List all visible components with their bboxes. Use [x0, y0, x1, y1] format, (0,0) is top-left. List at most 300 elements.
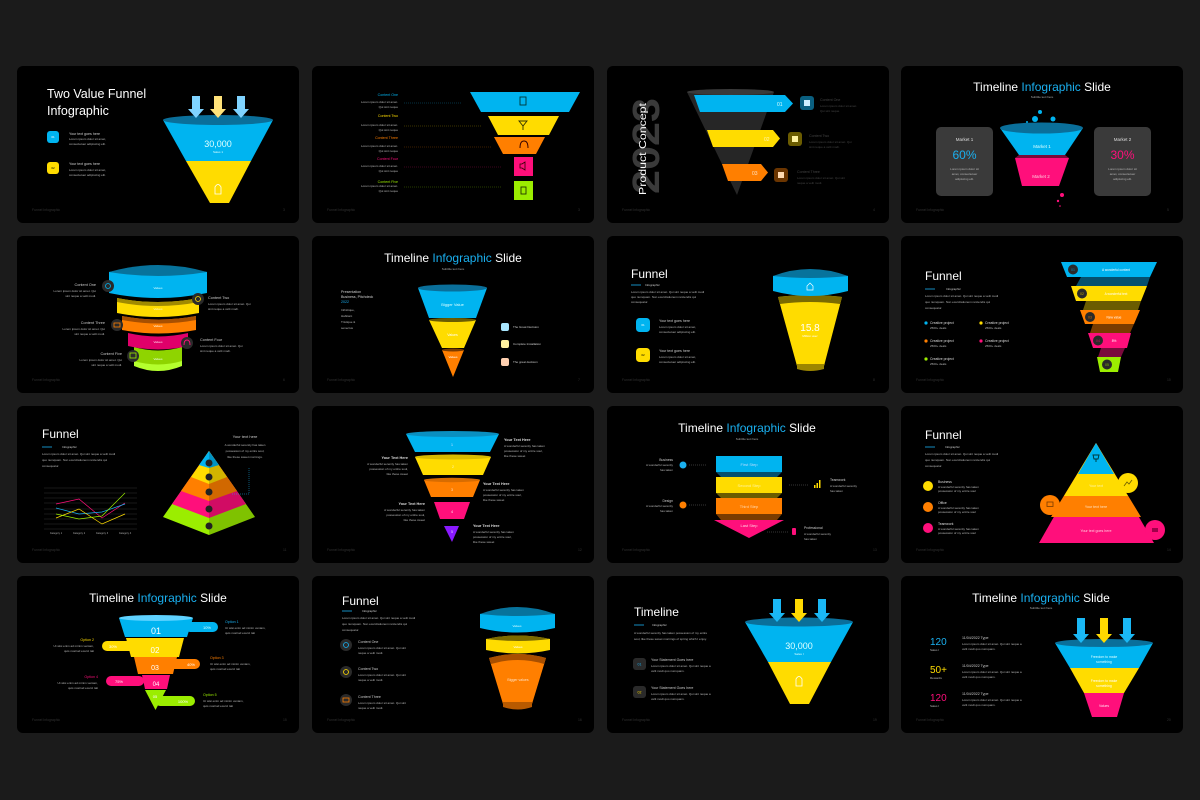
vertical title: Product Concept — [638, 103, 649, 195]
heading: Timeline Infographic Slide — [678, 421, 816, 435]
list item 01 — [47, 131, 106, 146]
list item 02: Lorem ipsum dolor sit amet, — [69, 168, 106, 172]
text blocks: A wonderful serenity has taken — [483, 488, 524, 492]
heading: Timeline Infographic Slide — [384, 251, 522, 265]
stats: Lorem ipsum dolor sit amet. Qui sint neque a — [962, 670, 1022, 674]
stats — [930, 636, 1022, 708]
funnel with pills — [102, 615, 218, 710]
heading: Lorem ipsum dolor sit amet. Qui sint neque a velit modi — [925, 294, 999, 298]
icons and text: Lorem ipsum dolor sit amet. Qui — [809, 140, 852, 144]
legend: Business — [938, 480, 952, 484]
content list: Content Two — [358, 667, 378, 671]
funnel with pills: 02 — [151, 646, 160, 655]
option texts: Ut wisi enim ad minim veniam, — [225, 626, 266, 630]
icons and text: Content One — [820, 98, 840, 102]
item 01 — [636, 318, 696, 334]
left labels: Lorem ipsum dolor sit amet. — [361, 164, 398, 168]
heading: consequatur. — [631, 300, 648, 304]
legend icons — [501, 323, 541, 366]
text blocks: A wonderful serenity has taken — [473, 530, 514, 534]
funnel chart — [163, 115, 273, 203]
slide 4: markets funnel: 5 — [1167, 208, 1169, 212]
option texts: Option 4 — [84, 675, 98, 679]
text blocks: like these sweet — [473, 540, 495, 544]
heading: quo numquam. Non exercitationem reiciendis qui — [631, 295, 696, 299]
item 02: consectetuer adipiscing elit. — [659, 360, 696, 364]
ring stack: Values — [154, 324, 163, 328]
item 01: Lorem ipsum dolor sit amet, — [659, 325, 696, 329]
funnel: 30,000 — [785, 641, 813, 651]
funnel: Freedom to make — [1091, 679, 1117, 683]
slide 12: pyramid with badges — [901, 406, 1183, 563]
left labels: Lorem ipsum dolor sit amet. — [361, 184, 398, 188]
labels: sint neque a velit modi. — [65, 294, 96, 298]
zigzag funnel: 03 — [1088, 316, 1092, 320]
heading: Lorem ipsum dolor sit amet. Qui sint neque a velit modi — [925, 452, 999, 456]
step bars — [714, 456, 784, 538]
zigzag funnel: New value — [1107, 316, 1122, 320]
heading: quo numquam. Non exercitationem reiciendis qui — [42, 458, 107, 462]
market 1 card: Lorem ipsum dolor sit — [950, 167, 979, 171]
content list — [340, 639, 406, 710]
stats: velit modi quo numquam. — [962, 675, 996, 679]
left text: 2022 — [341, 300, 349, 304]
heading: Infographic — [946, 287, 961, 291]
pyramid: Your text — [1089, 484, 1103, 488]
left labels — [361, 93, 399, 193]
left labels: Content One — [378, 93, 398, 97]
heading: consequatur. — [925, 306, 942, 310]
arrow steps — [694, 95, 793, 181]
legend: possession of my entire soul — [938, 531, 976, 535]
callout: Your text here — [233, 434, 258, 439]
pyramid: Your text here — [1085, 505, 1107, 509]
stats: velit modi quo numquam. — [962, 703, 996, 707]
labels — [53, 283, 251, 367]
left labels: Content Five — [378, 180, 398, 184]
item 01: consectetuer adipiscing elit. — [659, 330, 696, 334]
content list: Content One — [358, 640, 378, 644]
option texts: quis nostrud exerci tati — [203, 704, 233, 708]
funnel — [773, 269, 848, 371]
heading: consequatur. — [342, 628, 359, 632]
slide 1: two value funnel: Funnel Infographic — [32, 208, 60, 212]
slide 7: funnel 15.8 — [607, 236, 889, 393]
text blocks: Your Text Here — [473, 524, 499, 528]
left text: senectus — [341, 326, 354, 330]
pyramid: Your text goes here — [1080, 529, 1112, 533]
heading: Funnel — [42, 427, 79, 441]
heading: consequatur. — [42, 464, 59, 468]
funnel: Values — [449, 355, 458, 359]
slide 2: five step funnel: 3 — [578, 208, 580, 212]
slide 11: step funnel — [607, 406, 889, 563]
icons and text: Lorem ipsum dolor sit amet. — [820, 104, 857, 108]
legend icons: The Great Decision — [513, 325, 539, 329]
stats: Lorem ipsum dolor sit amet. Qui sint neque a — [962, 698, 1022, 702]
callout: A wonderful serenity has taken — [225, 443, 266, 447]
heading — [42, 427, 116, 468]
heading: quo numquam. Non exercitationem reiciendis qui — [342, 622, 407, 626]
slide 6: three level funnel: 7 — [578, 378, 580, 382]
funnel discs: 3 — [451, 487, 454, 492]
legend: Office — [938, 501, 947, 505]
left labels: Qui sint neque — [379, 189, 398, 193]
slide 14: ring funnel orange — [312, 576, 594, 733]
legend: A wonderful serenity has taken — [938, 506, 979, 510]
list item 02: Your text goes here — [69, 162, 100, 166]
funnel discs: 2 — [452, 464, 455, 469]
labels: sint neque a velit modi. — [200, 349, 231, 353]
heading: Funnel — [925, 269, 962, 283]
line chart: Category 2 — [73, 532, 86, 535]
heading: Infographic — [362, 609, 377, 613]
market 2 card — [1094, 127, 1151, 196]
content list: Lorem ipsum dolor sit amet. Qui sint — [358, 646, 406, 650]
slide 5: stacked rings: Funnel Infographic — [32, 378, 60, 382]
funnel discs — [406, 431, 499, 542]
text blocks: possession of my entire soul, — [483, 493, 522, 497]
zigzag funnel: 02 — [1080, 292, 1084, 296]
legend: 2500+ deals — [985, 326, 1002, 330]
funnel: Values — [1099, 704, 1109, 708]
icons and text: neque a velit modi. — [797, 181, 822, 185]
arrows — [769, 599, 830, 622]
heading: Infographic — [47, 104, 109, 118]
side labels: has taken — [804, 537, 817, 541]
heading: Timeline — [634, 605, 679, 619]
slide 11: step funnel: 13 — [873, 548, 877, 552]
list item 01: Lorem ipsum dolor sit amet, — [69, 137, 106, 141]
funnel: something — [1096, 684, 1112, 688]
left labels: Lorem ipsum dolor sit amet. — [361, 144, 398, 148]
heading: Funnel — [631, 267, 668, 281]
market 1 card: Market 1 — [956, 137, 974, 142]
icons and text: sint neque a velit modi. — [809, 145, 840, 149]
funnel: Values — [447, 333, 458, 337]
stats: Sales I — [930, 648, 939, 652]
legend — [923, 480, 979, 535]
heading: Subtitle text here — [736, 437, 759, 441]
heading — [384, 251, 522, 271]
slide 8: zigzag funnel: 10 — [1167, 378, 1171, 382]
option texts: Ut wisi enim ad minim veniam, — [203, 699, 244, 703]
content list: neque a velit modi. — [358, 706, 383, 710]
stats: Sales I — [930, 704, 939, 708]
text blocks: A wonderful serenity has taken — [504, 444, 545, 448]
stats: 11/04/2022 Type — [962, 636, 988, 640]
option texts: Option 1 — [225, 620, 239, 624]
line chart — [44, 488, 137, 535]
labels: Lorem ipsum dolor sit amet. Qui — [79, 358, 122, 362]
slide 10: five disc funnel: Funnel Infographic — [327, 548, 355, 552]
side labels: A wonderful serenity — [804, 532, 832, 536]
option texts: quis nostrud exerci tati — [225, 631, 255, 635]
slide 14: ring funnel orange: 16 — [578, 718, 582, 722]
step bars: Third Step — [740, 504, 759, 509]
content list: neque a velit modi. — [358, 678, 383, 682]
stats: Lorem ipsum dolor sit amet. Qui sint neque a — [962, 642, 1022, 646]
slide 3: product concept: Funnel Infographic — [622, 208, 650, 212]
content list: Lorem ipsum dolor sit amet. Qui sint — [358, 701, 406, 705]
labels: Lorem ipsum dolor sit amet. Qui — [53, 289, 96, 293]
legend: A wonderful serenity has taken — [938, 485, 979, 489]
text blocks: A wonderful serenity has taken — [384, 508, 425, 512]
ring stack: Values — [154, 286, 163, 290]
funnel: 15.8 — [800, 323, 820, 334]
arrow steps: 03 — [752, 171, 758, 177]
arrow steps: 02 — [764, 137, 770, 143]
slide 13: options funnel — [17, 576, 299, 733]
option texts: Option 2 — [80, 638, 94, 642]
content list: neque a velit modi. — [358, 651, 383, 655]
labels: sint neque a velit modi. — [74, 332, 105, 336]
stats: 120 — [930, 637, 947, 648]
step bars: Second Step — [738, 483, 761, 488]
side labels: has taken — [660, 468, 673, 472]
funnel — [418, 284, 487, 377]
slide 5: stacked rings — [17, 236, 299, 393]
left labels: Qui sint neque — [379, 128, 398, 132]
legend icons: The great decision — [513, 360, 538, 364]
text blocks — [367, 438, 545, 544]
legend: Creative project — [985, 321, 1009, 325]
legend: Creative project — [930, 339, 954, 343]
option texts: quis nostrud exerci tati — [64, 649, 94, 653]
slide 6: three level funnel — [312, 236, 594, 393]
text blocks: possession of my entire soul, — [473, 535, 512, 539]
text blocks: like these sweet — [387, 472, 408, 476]
legend: Teamwork — [938, 522, 954, 526]
funnel discs: 5 — [451, 529, 454, 534]
slide 4: markets funnel: Funnel Infographic — [916, 208, 944, 212]
slide 7: funnel 15.8: Funnel Infographic — [622, 378, 650, 382]
stats: 11/04/2022 Type — [962, 664, 988, 668]
funnel with pills: 40% — [187, 662, 195, 667]
slide 13: options funnel: 15 — [283, 718, 287, 722]
funnel with pills: 01 — [151, 626, 161, 636]
slide 12: pyramid with badges: 14 — [1167, 548, 1171, 552]
legend: possession of my entire soul — [938, 510, 976, 514]
heading: quo numquam. Non exercitationem reiciendis qui — [925, 458, 990, 462]
dark cone — [687, 89, 774, 195]
heading — [47, 87, 146, 118]
statements: 02 — [638, 690, 641, 694]
funnel: Bigger values — [507, 678, 529, 682]
slide 16: stats funnel — [901, 576, 1183, 733]
zigzag funnel: A wonderful text — [1105, 292, 1127, 296]
item 02 — [636, 348, 696, 364]
option texts: Option 3 — [210, 656, 224, 660]
text blocks: Your Text Here — [382, 456, 408, 460]
labels: Lorem ipsum dolor sit amet. Qui — [62, 327, 105, 331]
funnel with pills: 04 — [153, 682, 160, 688]
zigzag funnel: 01 — [1071, 268, 1075, 272]
slide 7: funnel 15.8: 8 — [873, 378, 875, 382]
slide 16: stats funnel: Funnel Infographic — [916, 718, 944, 722]
legend: Creative project — [930, 357, 954, 361]
callout: like these sweet mornings. — [227, 455, 263, 459]
heading: Subtitle text here — [1030, 606, 1053, 610]
slide 15: timeline funnel: 19 — [873, 718, 877, 722]
funnel — [745, 618, 853, 704]
line chart: Category 4 — [119, 532, 132, 535]
left labels: Content Three — [375, 136, 398, 140]
text blocks: possession of my entire soul, — [386, 513, 425, 517]
heading: Infographic — [652, 623, 667, 627]
funnel chart: Sales 1 — [213, 150, 223, 154]
heading — [634, 605, 708, 641]
option texts: Ut wisi enim ad minim veniam, — [210, 662, 251, 666]
statements: 01 — [638, 662, 641, 666]
icons and text: Lorem ipsum dolor sit amet. Qui sint — [797, 176, 845, 180]
stats: velit modi quo numquam. — [962, 647, 996, 651]
ring stack — [109, 265, 207, 371]
icons and text: Content Two — [809, 134, 829, 138]
item 02: 02 — [641, 353, 645, 357]
funnel: Million user — [802, 334, 818, 338]
side labels: A wonderful serenity — [646, 504, 673, 508]
heading: Lorem ipsum dolor sit amet. Qui sint neque a velit modi — [42, 452, 116, 456]
list item 02: consectetuer adipiscing elit. — [69, 173, 106, 177]
funnel: Bigger Value — [441, 302, 465, 307]
slide 3: product concept: 4 — [873, 208, 875, 212]
zigzag funnel: A wonderful content — [1102, 268, 1130, 272]
market 2 card: amet, consectetuer — [1110, 172, 1135, 176]
pyramid — [163, 451, 255, 535]
step bars: First Step — [740, 462, 758, 467]
labels: Content Five — [100, 352, 122, 356]
market 2 card: Market 2 — [1114, 137, 1132, 142]
market 2 card: Lorem ipsum dolor sit — [1108, 167, 1137, 171]
zigzag funnel — [1061, 262, 1157, 372]
funnel with pills: 100% — [178, 699, 189, 704]
market 1 card: amet, consectetuer — [952, 172, 977, 176]
list item 02: 02 — [51, 166, 55, 170]
vertical title: 2023 — [626, 98, 668, 194]
slide 15: timeline funnel: Funnel Infographic — [622, 718, 650, 722]
slide 8: zigzag funnel — [901, 236, 1183, 393]
ring stack: Values — [154, 307, 163, 311]
funnel — [480, 607, 555, 710]
left text: Habitant — [341, 314, 352, 318]
callout — [225, 434, 266, 494]
funnel discs: 1 — [451, 442, 454, 447]
legend: 2500+ deals — [930, 344, 947, 348]
funnel — [1055, 639, 1153, 717]
arrow steps: 01 — [777, 102, 783, 108]
legend: 2500+ deals — [985, 344, 1002, 348]
slide 4: markets funnel — [901, 66, 1183, 223]
list item 01: consectetuer adipiscing elit. — [69, 142, 106, 146]
text blocks: like these sweet — [404, 518, 425, 522]
funnel: Values — [514, 645, 523, 649]
icons and text — [774, 96, 857, 185]
heading: Subtitle text here — [442, 267, 465, 271]
funnel with pills: 03 — [151, 665, 159, 672]
funnel: Market 2 — [1032, 174, 1050, 179]
slide 8: zigzag funnel: Funnel Infographic — [916, 378, 944, 382]
stats: 11/04/2022 Type — [962, 692, 988, 696]
ring stack: Values — [154, 340, 163, 344]
market 2 card: 30% — [1110, 148, 1135, 162]
labels: Content Four — [200, 338, 223, 342]
zigzag funnel: 8% — [1112, 339, 1116, 343]
item 01: 01 — [641, 323, 645, 327]
text blocks: A wonderful serenity has taken — [367, 462, 408, 466]
side labels: has taken — [660, 509, 673, 513]
labels: Lorem ipsum dolor sit amet. Qui — [208, 302, 251, 306]
funnel stack — [470, 92, 580, 200]
funnel with pills: 30% — [109, 644, 117, 649]
labels: Content One — [74, 283, 96, 287]
heading: Timeline Infographic Slide — [972, 591, 1110, 605]
slide 2: five step funnel: Funnel Infographic — [327, 208, 355, 212]
option texts: quis nostrud exerci tati — [68, 686, 98, 690]
legend — [924, 321, 1009, 366]
stats: 50+ — [930, 665, 947, 676]
funnel: Freedom to make — [1091, 655, 1117, 659]
left labels: Lorem ipsum dolor sit amet. — [361, 123, 398, 127]
funnel: Sales I — [794, 652, 804, 656]
zigzag funnel: 04 — [1096, 339, 1100, 343]
statements: velit modi quo numquam. — [651, 697, 685, 701]
slide 10: five disc funnel: 12 — [578, 548, 582, 552]
left text: Presentation — [341, 290, 361, 294]
step bars: Last Step — [741, 523, 758, 528]
statements: Your Statement Goes here — [651, 686, 693, 690]
heading: Infographic — [62, 445, 77, 449]
list item 01: 01 — [51, 135, 55, 139]
option texts: quis nostrud exerci tati — [210, 667, 240, 671]
legend: Creative project — [930, 321, 954, 325]
legend: 2500+ deals — [930, 362, 947, 366]
text blocks: like these sweet — [483, 498, 505, 502]
option texts: Ut wisi enim ad minim veniam, — [57, 681, 98, 685]
heading: consequatur. — [925, 464, 942, 468]
labels: Lorem ipsum dolor sit amet. Qui — [200, 344, 243, 348]
slide 5: stacked rings: 6 — [283, 378, 285, 382]
side labels: Professional — [804, 526, 823, 530]
side labels: Design — [662, 499, 673, 503]
heading: Lorem ipsum dolor sit amet. Qui sint neque a velit modi — [631, 290, 705, 294]
legend: 2500+ deals — [930, 326, 947, 330]
option texts: Option 5 — [203, 693, 217, 697]
slide 15: timeline funnel — [607, 576, 889, 733]
icons and text: Content Three — [797, 170, 820, 174]
slide 6: three level funnel: Funnel Infographic — [327, 378, 355, 382]
text blocks: Your Text Here — [399, 502, 425, 506]
heading — [925, 428, 999, 468]
option texts: Ut wisi enim ad minim veniam, — [53, 644, 94, 648]
legend: possession of my entire soul — [938, 489, 976, 493]
line chart: Category 3 — [96, 532, 109, 535]
statements: Lorem ipsum dolor sit amet. Qui sint neque a — [651, 692, 711, 696]
slide 9: chart and pyramid — [17, 406, 299, 563]
left text: Business, Pitchdeck — [341, 295, 373, 299]
market 1 card: adipiscing elit. — [955, 177, 974, 181]
slide 16: stats funnel: 20 — [1167, 718, 1171, 722]
slide 3: product concept — [607, 66, 889, 223]
left text: Infinitique, — [341, 308, 355, 312]
content list: Content Three — [358, 695, 381, 699]
left text: Tristique & — [341, 320, 355, 324]
stats: Rewards — [930, 676, 942, 680]
funnel — [1000, 110, 1083, 207]
funnel discs: 4 — [451, 509, 454, 514]
funnel with pills: 05 — [153, 694, 158, 699]
legend icons: Complete Installation — [513, 342, 541, 346]
